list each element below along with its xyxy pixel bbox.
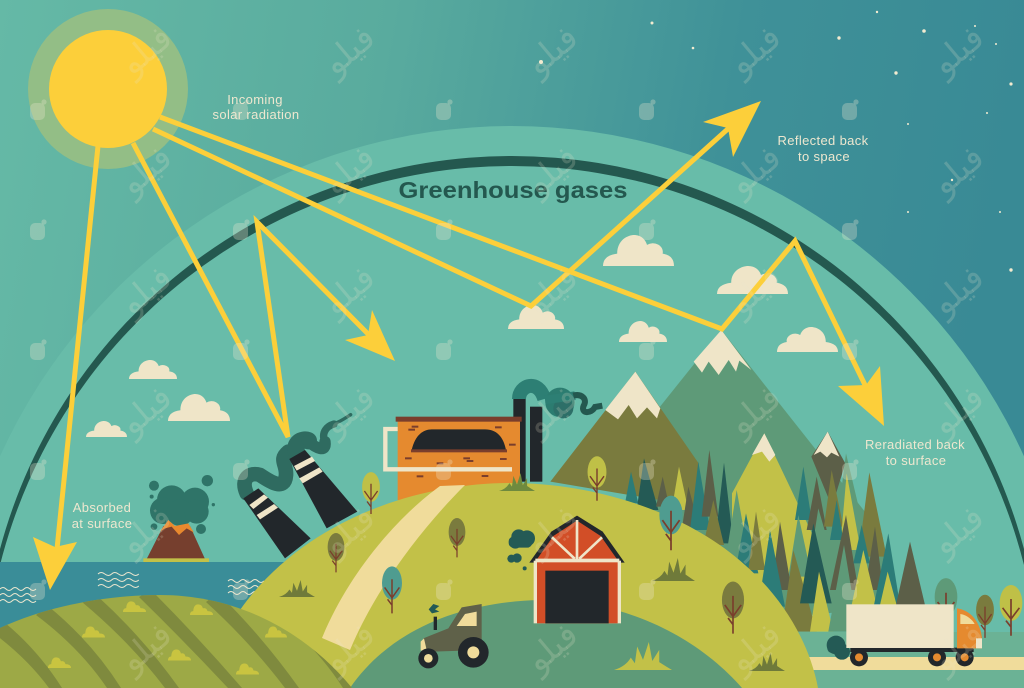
yellow bush on green hill: [614, 642, 672, 670]
truck cargo box: [846, 604, 954, 648]
clouds: [86, 235, 838, 437]
middle yellow-green hill: [240, 483, 818, 688]
label: absorbed at surface: [72, 500, 132, 531]
arrow: absorbed at surface: [33, 146, 98, 590]
tractor body: [423, 604, 482, 652]
wave marks: [0, 572, 264, 602]
foreground green hill: [350, 600, 742, 688]
tractor: [418, 604, 489, 668]
label: reflected back to space: to space: [798, 149, 850, 164]
label: incoming solar radiation: Incoming: [227, 92, 283, 107]
barn trim: [535, 520, 619, 560]
tractor window: [457, 612, 477, 626]
sea: [0, 562, 300, 662]
barn exhaust cloud: [507, 529, 535, 570]
bricks: [405, 426, 516, 477]
stars: [539, 11, 1013, 272]
trees on hill: [328, 456, 744, 634]
bushes on hill: [279, 473, 785, 671]
barn door: [545, 571, 609, 623]
furnace opening: [411, 429, 507, 452]
truck cab: [957, 608, 982, 648]
label: reradiated back to surface: [865, 437, 965, 468]
label: reflected back to space: [778, 133, 869, 164]
factory smoke: [519, 386, 602, 418]
label: incoming solar radiation: solar radiation: [213, 107, 299, 122]
factory stacks: [513, 398, 542, 482]
mountains: [550, 330, 895, 632]
factory roof: [396, 417, 522, 422]
factory wall: [398, 420, 520, 500]
rear wheel: [458, 637, 489, 668]
label: reradiated back to surface: Reradiated back: [865, 437, 965, 452]
dirt road: [322, 485, 465, 650]
brick factory: [385, 417, 522, 500]
cab window: [960, 614, 975, 624]
greenhouse gas layer arc: [0, 156, 1024, 565]
front wheel: [418, 648, 438, 668]
label: incoming solar radiation: [213, 92, 299, 122]
truck chassis: [850, 648, 974, 652]
mountain: green peak: [639, 330, 895, 632]
heading: Greenhouse gases: [398, 177, 628, 203]
barn wall: [534, 561, 621, 623]
label: absorbed at surface: at surface: [72, 516, 132, 531]
sun: [28, 9, 188, 169]
truck exhaust: [827, 636, 850, 660]
volcano: [143, 475, 215, 563]
tractor grille: [421, 638, 427, 651]
truck wheels: [850, 648, 974, 666]
label: reradiated back to surface: to surface: [886, 453, 946, 468]
mountain: olive peak: [550, 372, 699, 507]
striped field: [0, 590, 357, 688]
label: absorbed at surface: Absorbed: [73, 500, 131, 515]
chimney: right: [289, 450, 357, 528]
cream pipe: [385, 429, 512, 469]
cab bumper: [976, 638, 982, 648]
mountain: yellow peak: [732, 433, 819, 587]
arrow: reflected back to space: [153, 101, 761, 306]
chimney: left: [243, 488, 311, 558]
truck: [827, 604, 982, 666]
chimney smoke plumes: [245, 415, 351, 493]
pine forest: [625, 450, 925, 632]
roadside trees: [935, 578, 1022, 638]
factory chimneys: [243, 450, 357, 558]
mountain: small dark peak: [811, 432, 845, 507]
barn roof: [529, 516, 625, 563]
barn: [507, 516, 625, 623]
arrow: bounced to ground then deflected: [133, 143, 395, 437]
smoke: left chimney: [245, 452, 288, 493]
right ground strip with road: [790, 632, 1024, 688]
smoke: right chimney: [296, 415, 351, 453]
arrow: reradiated back to surface: [160, 117, 884, 426]
exhaust pipe: [429, 604, 439, 630]
label: reflected back to space: Reflected back: [778, 133, 869, 148]
